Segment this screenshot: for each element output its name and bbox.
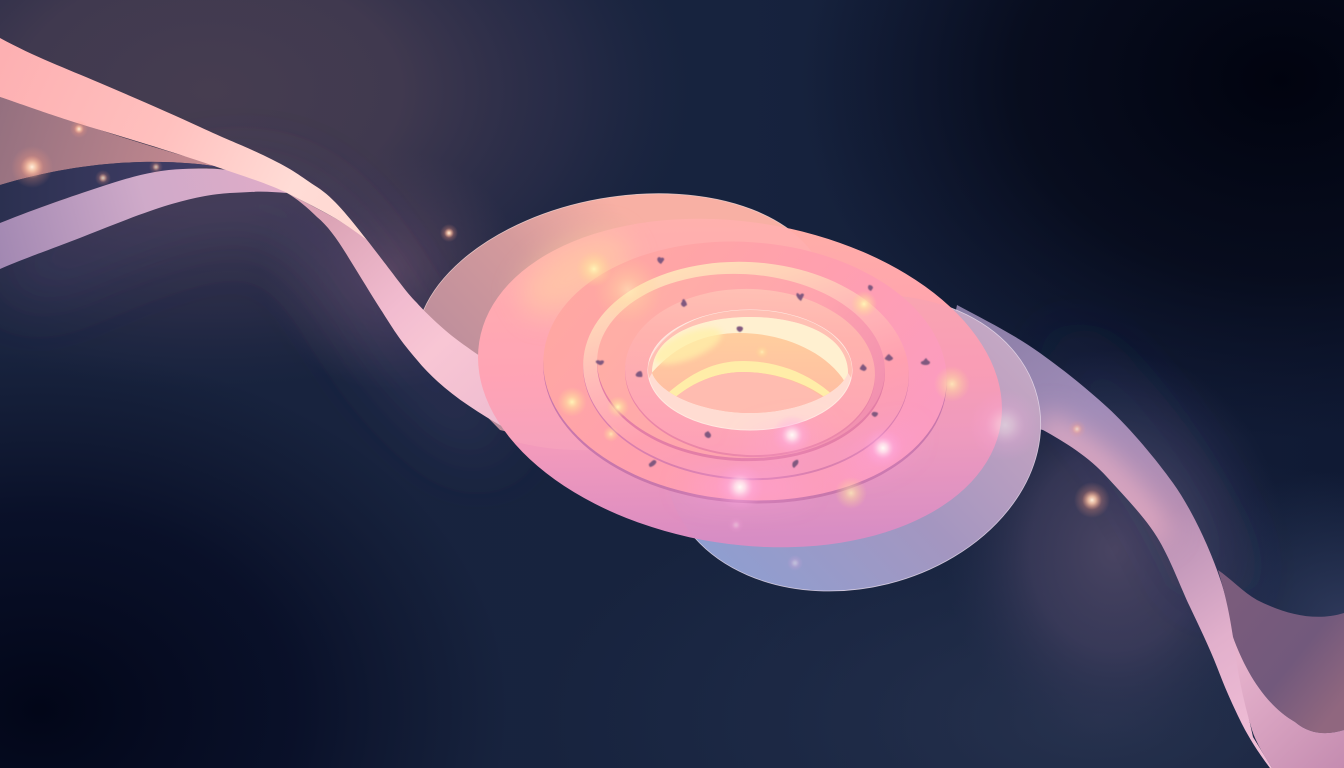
ring 5: inner band around the hole	[622, 285, 878, 461]
pink floor	[676, 372, 822, 413]
upper hole wall	[648, 310, 852, 378]
warm glow on big disc upper left	[508, 219, 642, 331]
ribbon: lower S-curve section	[287, 193, 530, 428]
ring 4: stepped surface	[592, 267, 890, 468]
peach mid floor	[650, 333, 845, 420]
ribbon: lavender left strand	[0, 169, 287, 269]
yellow arc	[669, 361, 830, 396]
ribbon: right strand upper section	[950, 305, 1272, 768]
big pink disc with see-through overlaps	[478, 219, 1002, 548]
ribbon: upper pink strand	[0, 38, 367, 240]
floating glow particles	[11, 120, 1110, 518]
warm glow inside hole	[654, 326, 723, 366]
glow dots on the rings	[557, 251, 1041, 571]
cream top crescent	[652, 317, 848, 380]
ring 2: thick outer ring with edge	[534, 228, 956, 517]
blue disc: lower right translucent disc	[634, 256, 1072, 630]
central hole: floor, crescents and glowing arc	[645, 309, 856, 430]
back disc: pale translucent disc	[423, 193, 788, 432]
dark band between ribbons	[0, 162, 227, 223]
small purple markers on the rings	[596, 257, 930, 468]
back wedge: dusky ribbon underside top left	[0, 97, 227, 185]
ribbon: right lower pink section	[1233, 637, 1344, 768]
ribbon: right dusky wedge	[1218, 570, 1344, 733]
ring 3: pale inner wall	[578, 254, 914, 488]
magenta halos along the lower rim	[685, 423, 917, 499]
